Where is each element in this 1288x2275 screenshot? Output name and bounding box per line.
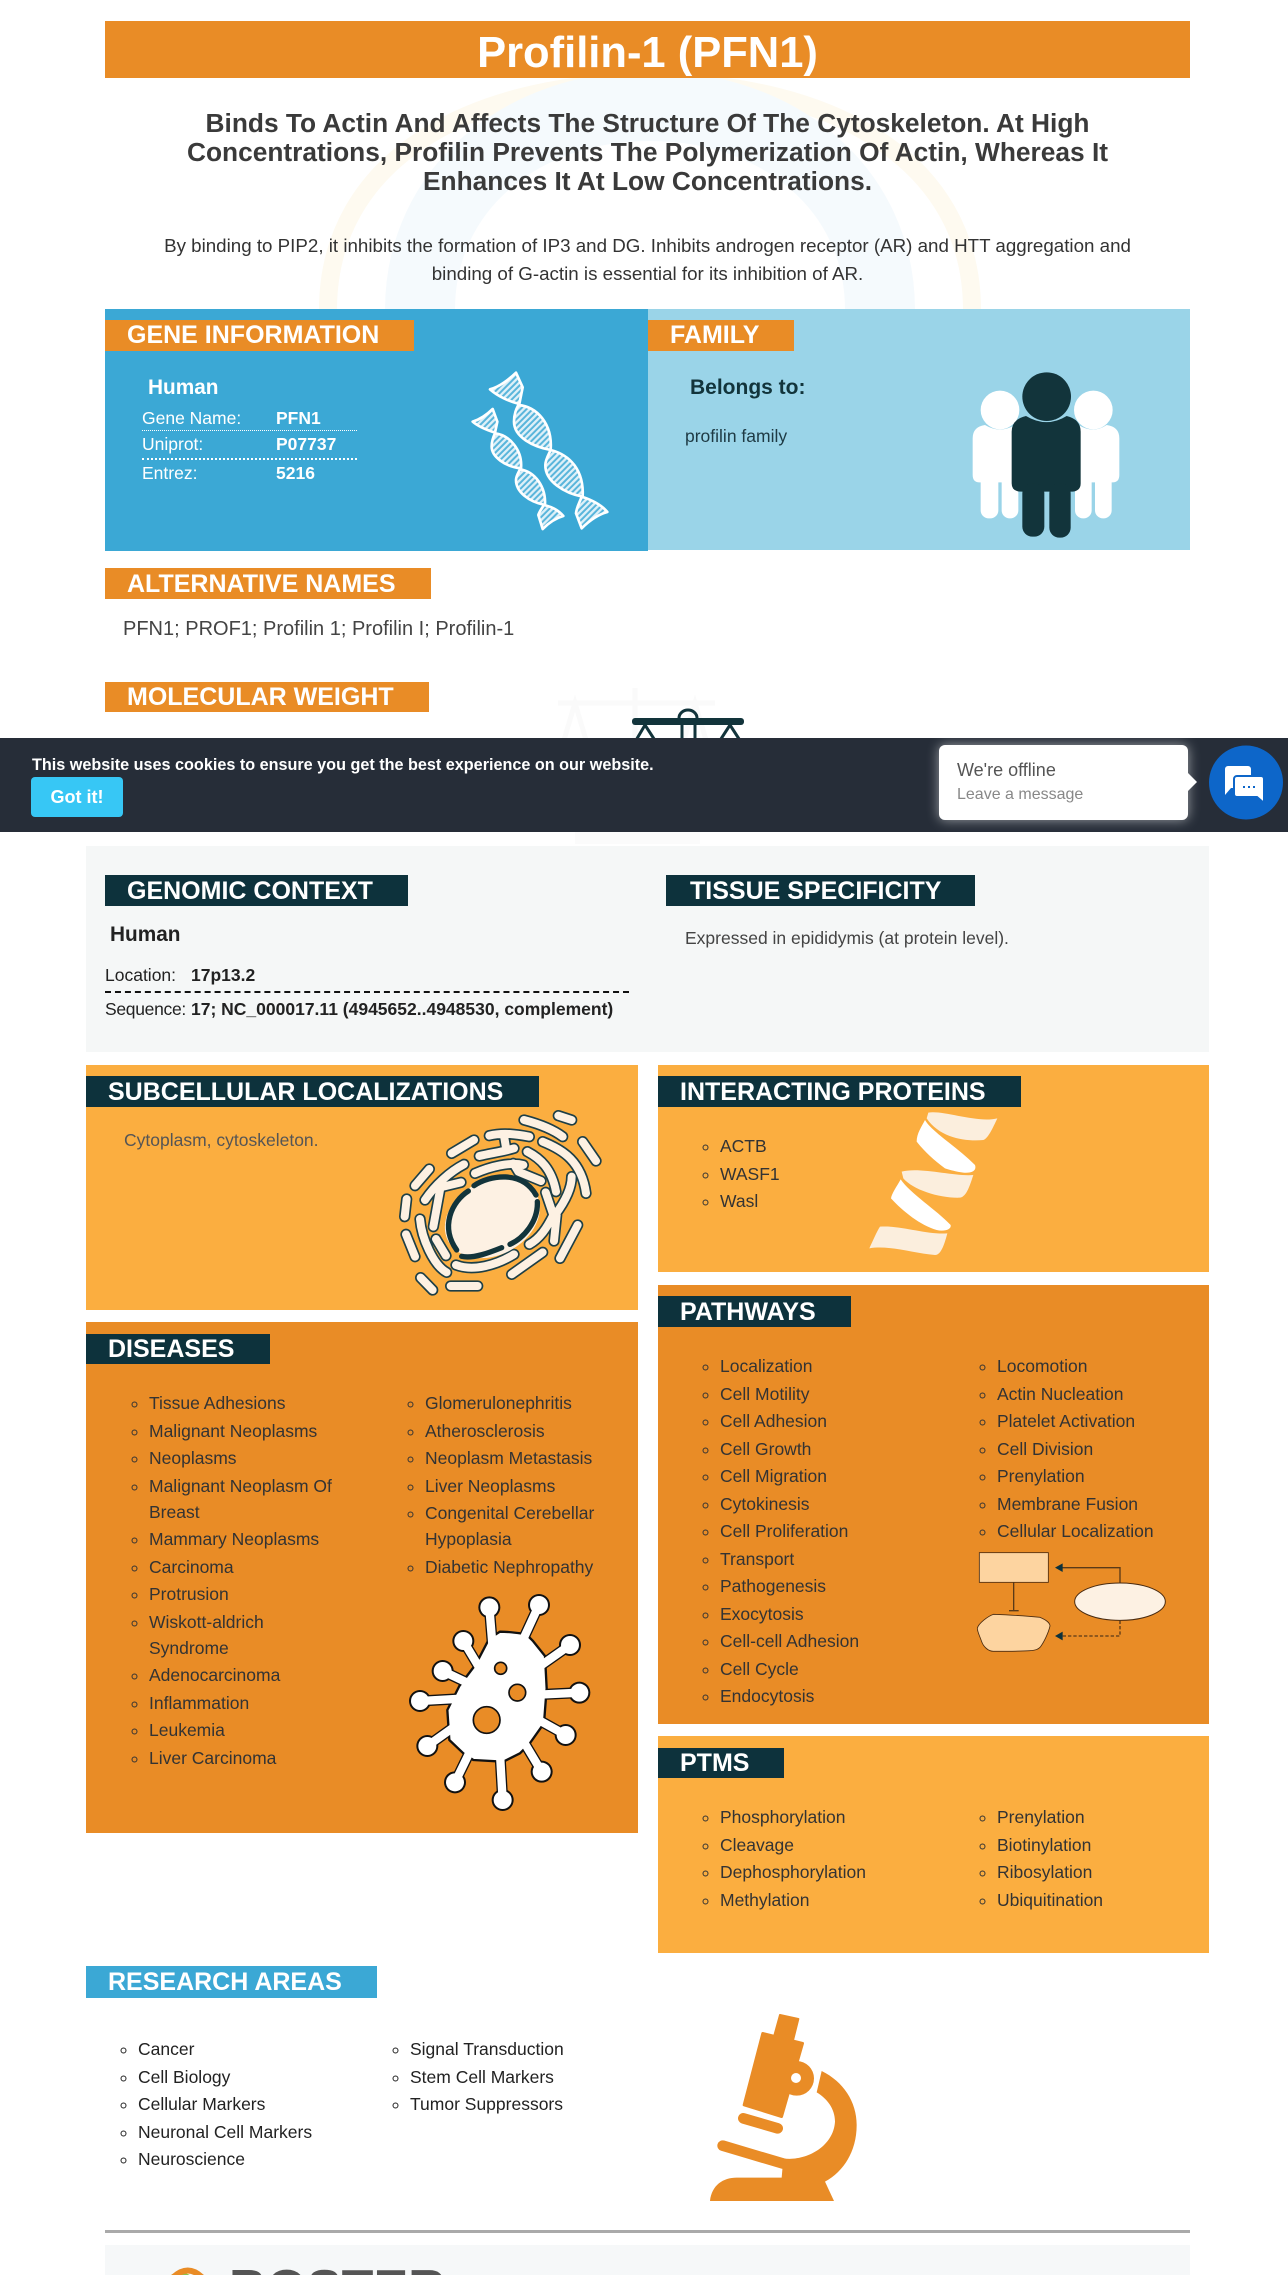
heading: interacting proteins: INTERACTING PROTEINS [680, 1078, 986, 1106]
gene name row: Gene Name: [142, 408, 241, 428]
pathway list column 2: Prenylation [997, 1466, 1085, 1486]
description paragraph: binding of G-actin is essential for its inhibition of AR. [432, 263, 863, 284]
sequence row: Sequence: [105, 999, 186, 1019]
pathway list column 1: Cell Migration [720, 1466, 827, 1486]
disease list column 1: Breast [149, 1502, 200, 1522]
PTM list column 2: Ribosylation [997, 1862, 1092, 1882]
heading: molecular weight: MOLECULAR WEIGHT [127, 683, 394, 711]
cookie banner [0, 738, 1288, 832]
PTM list column 2: Prenylation [997, 1807, 1085, 1827]
icon: DNA helix [471, 371, 609, 530]
icon: chat button [1209, 746, 1283, 820]
gene name row [142, 403, 357, 431]
family name: profilin family [685, 426, 787, 446]
disease list column 1: Protrusion [149, 1584, 229, 1604]
disease list column 1: Leukemia [149, 1720, 225, 1740]
summary heading [187, 108, 1108, 196]
entrez row: Entrez: [142, 463, 197, 483]
disease list column 1: Malignant Neoplasms [149, 1420, 317, 1440]
protein list: Wasl [720, 1191, 758, 1211]
icon: cell [399, 1110, 602, 1296]
heading: diseases: DISEASES [108, 1335, 234, 1363]
panel: PTMs [658, 1736, 1209, 1953]
species label: Human [110, 923, 180, 946]
heading: pathways: PATHWAYS [680, 1298, 816, 1326]
icon: protein ribbon [869, 1112, 998, 1255]
disease list column 2: Hypoplasia [425, 1529, 512, 1549]
panel: diseases [86, 1322, 638, 1833]
footer panel [105, 2245, 1190, 2275]
entrez row [142, 463, 315, 483]
heading: tissue specificity: TISSUE SPECIFICITY [690, 877, 941, 905]
pathway list column 1: Cytokinesis [720, 1494, 809, 1514]
PTM list column 1: Methylation [720, 1890, 810, 1910]
disease list column 2: Liver Neoplasms [425, 1476, 555, 1496]
research list column 1: Cell Biology [138, 2066, 230, 2086]
icon: pathway diagram [976, 1552, 1166, 1652]
heading: research areas: RESEARCH AREAS [108, 1968, 342, 1996]
protein list [702, 1136, 780, 1211]
pathway list column 1: Pathogenesis [720, 1576, 826, 1596]
panel: family [648, 309, 1190, 550]
research list column 1 [120, 2039, 312, 2169]
PTM list column 2: Ubiquitination [997, 1890, 1103, 1910]
icon: logo [171, 2268, 204, 2275]
heading: genomic context: GENOMIC CONTEXT [127, 877, 373, 905]
research list column 2: Signal Transduction [410, 2039, 564, 2059]
disease list column 1: Wiskott-aldrich [149, 1612, 264, 1632]
disease list column 2: Atherosclerosis [425, 1420, 545, 1440]
panel: subcellular localizations [86, 1065, 638, 1310]
tissue text: Expressed in epididymis (at protein level). [685, 928, 1009, 948]
sequence row: 17; NC_000017.11 (4945652..4948530, complement) [191, 999, 613, 1019]
panel: interacting proteins [658, 1065, 1209, 1272]
disease list column 1: Neoplasms [149, 1448, 237, 1468]
pathway list column 1: Exocytosis [720, 1604, 804, 1624]
cookie message: This website uses cookies to ensure you get the best experience on our website. [32, 756, 654, 774]
research list column 2 [392, 2039, 564, 2114]
research list column 2: Stem Cell Markers [410, 2066, 554, 2086]
tooltip pointer [1188, 773, 1197, 791]
disease list column 1: Adenocarcinoma [149, 1665, 280, 1685]
entrez row: 5216 [276, 463, 315, 483]
summary heading: Enhances It At Low Concentrations. [423, 166, 872, 196]
heading: pathways [658, 1296, 851, 1327]
pathway list column 2: Locomotion [997, 1356, 1087, 1376]
gene name row: PFN1 [276, 408, 321, 428]
alternative names text: PFN1; PROF1; Profilin 1; Profilin I; Profilin-1 [123, 618, 514, 640]
pathway list column 2 [980, 1356, 1154, 1541]
pathway list column 2: Cellular Localization [997, 1521, 1154, 1541]
panel: gene information [105, 309, 648, 551]
heading: PTMs [658, 1748, 784, 1778]
uniprot row: P07737 [276, 434, 336, 454]
title banner [105, 21, 1190, 78]
disease list column 2: Neoplasm Metastasis [425, 1448, 592, 1468]
button: got it [31, 777, 123, 817]
pathway list column 2: Platelet Activation [997, 1411, 1135, 1431]
disease list column 1: Mammary Neoplasms [149, 1529, 319, 1549]
disease list column 2: Congenital Cerebellar [425, 1503, 594, 1523]
species label: Human [148, 376, 218, 399]
pathway list column 2: Actin Nucleation [997, 1384, 1123, 1404]
research list column 2: Tumor Suppressors [410, 2094, 563, 2114]
pathway list column 1: Cell-cell Adhesion [720, 1631, 859, 1651]
uniprot row [142, 431, 357, 460]
heading: gene information: GENE INFORMATION [127, 321, 379, 349]
pathway list column 1: Cell Cycle [720, 1658, 799, 1678]
title banner: Profilin-1 (PFN1) [477, 29, 818, 77]
disease list column 1: Inflammation [149, 1692, 249, 1712]
icon: virus [409, 1594, 590, 1811]
PTM list column 1 [702, 1807, 866, 1910]
pathway list column 1 [702, 1356, 859, 1706]
disease list column 2: Diabetic Nephropathy [425, 1556, 593, 1576]
disease list column 1 [132, 1393, 332, 1768]
chat status: We're offline [957, 760, 1056, 780]
heading: diseases [86, 1334, 270, 1364]
disease list column 1: Malignant Neoplasm Of [149, 1476, 332, 1496]
protein list: WASF1 [720, 1164, 780, 1184]
PTM list column 1: Cleavage [720, 1834, 794, 1854]
location row: 17p13.2 [191, 965, 255, 985]
panel: genomic context and tissue specificity [86, 846, 1209, 1052]
heading: subcellular localizations: SUBCELLULAR LOCALIZATIONS [108, 1078, 503, 1106]
pathway list column 1: Localization [720, 1356, 812, 1376]
uniprot row: Uniprot: [142, 434, 203, 454]
disease list column 1: Tissue Adhesions [149, 1393, 286, 1413]
icon: group of people [972, 372, 1120, 538]
heading: alternative names: ALTERNATIVE NAMES [127, 570, 396, 598]
summary heading: Concentrations, Profilin Prevents The Polymerization Of Actin, Whereas It [187, 137, 1108, 167]
pathway list column 2: Cell Division [997, 1438, 1093, 1458]
panel: pathways [658, 1285, 1209, 1724]
research list column 1: Cancer [138, 2039, 194, 2059]
protein list: ACTB [720, 1136, 767, 1156]
belongs to label: Belongs to: [690, 376, 806, 399]
description paragraph [164, 235, 1131, 284]
watermark logo [319, 78, 981, 309]
pathway list column 1: Cell Adhesion [720, 1411, 827, 1431]
research list column 1: Cellular Markers [138, 2094, 265, 2114]
heading: PTMs: PTMS [680, 1749, 749, 1777]
button: got it: Got it! [50, 787, 103, 807]
pathway list column 1: Cell Growth [720, 1438, 811, 1458]
disease list column 2 [408, 1393, 594, 1576]
PTM list column 1: Dephosphorylation [720, 1862, 866, 1882]
disease list column 2: Glomerulonephritis [425, 1393, 572, 1413]
pathway list column 1: Cell Motility [720, 1384, 809, 1404]
description paragraph: By binding to PIP2, it inhibits the formation of IP3 and DG. Inhibits androgen receptor (AR) and HTT aggregation and [164, 235, 1131, 256]
PTM list column 2: Biotinylation [997, 1834, 1091, 1854]
chat tooltip [939, 745, 1188, 820]
pathway list column 1: Endocytosis [720, 1686, 814, 1706]
pathway list column 1: Cell Proliferation [720, 1521, 848, 1541]
divider [105, 2230, 1190, 2233]
localization text: Cytoplasm, cytoskeleton. [124, 1130, 319, 1150]
chat prompt: Leave a message [957, 786, 1083, 803]
PTM list column 2 [980, 1807, 1103, 1910]
heading: family [648, 320, 794, 351]
location row [105, 960, 629, 993]
pathway list column 2: Membrane Fusion [997, 1494, 1138, 1514]
disease list column 1: Syndrome [149, 1638, 229, 1658]
icon: balance scale [632, 708, 744, 738]
disease list column 1: Carcinoma [149, 1556, 234, 1576]
location row: Location: [105, 965, 176, 985]
research list column 1: Neuroscience [138, 2149, 245, 2169]
pathway list column 1: Transport [720, 1548, 794, 1568]
PTM list column 1: Phosphorylation [720, 1807, 846, 1827]
disease list column 1: Liver Carcinoma [149, 1748, 276, 1768]
heading: family: FAMILY [670, 321, 759, 349]
summary heading: Binds To Actin And Affects The Structure Of The Cytoskeleton. At High [206, 108, 1089, 138]
research list column 1: Neuronal Cell Markers [138, 2122, 312, 2142]
icon: microscope [710, 2014, 857, 2201]
